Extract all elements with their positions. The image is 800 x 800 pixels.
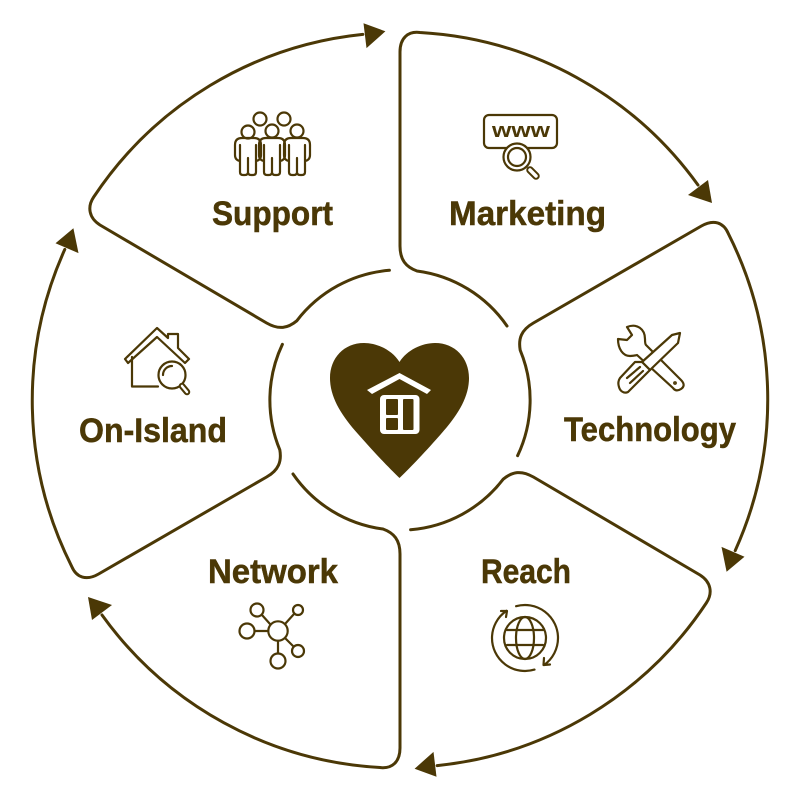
label: Network: Network [208, 553, 338, 591]
label: Technology: Technology [564, 411, 736, 449]
segment: Support [90, 23, 389, 327]
icon: network nodes [240, 604, 304, 668]
icon: www search [484, 115, 557, 176]
label: Marketing: Marketing [449, 195, 606, 233]
segment: On-Island [32, 228, 282, 578]
segment: Technology [518, 222, 768, 572]
label: Support: Support [212, 195, 333, 233]
icon: wrench and screwdriver [618, 326, 684, 393]
segment: Network [88, 474, 400, 768]
www text: www [491, 120, 551, 142]
segment: Reach [411, 473, 710, 777]
icon: support people [235, 112, 310, 175]
center heart with house [330, 343, 469, 478]
label: Reach: Reach [481, 553, 571, 591]
segment: Marketing [400, 32, 712, 326]
label: On-Island: On-Island [79, 412, 227, 450]
icon: rotating globe [492, 605, 558, 671]
icon: house search [125, 328, 189, 392]
